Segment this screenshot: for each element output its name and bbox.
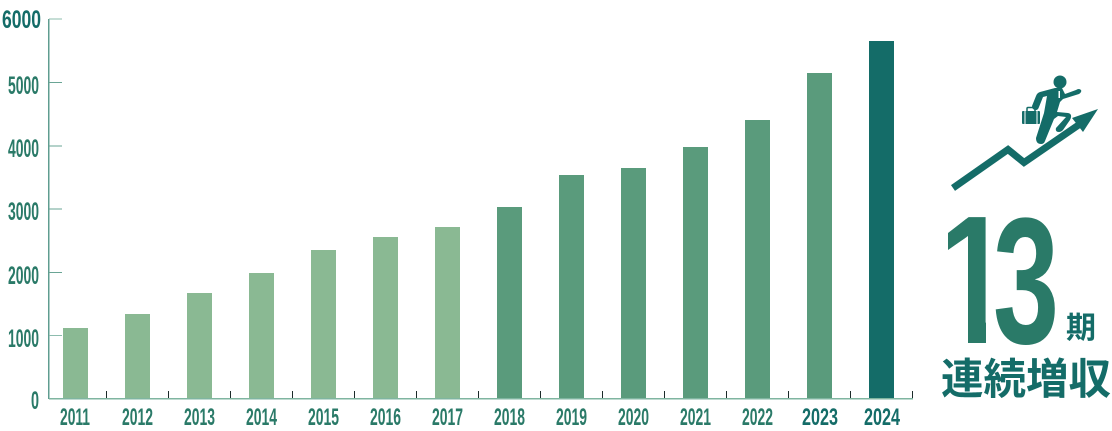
y axis labels: 1000 xyxy=(8,325,39,353)
icon: businessman running up a rising arrow xyxy=(953,76,1098,188)
headline number: 13 xyxy=(948,217,1055,345)
y axis labels xyxy=(2,6,41,415)
y axis labels: 4000 xyxy=(8,135,39,163)
icon: briefcase xyxy=(1022,108,1040,124)
y axis labels: 5000 xyxy=(8,72,39,100)
headline number: 13: 3 xyxy=(993,181,1059,382)
y axis labels: 3000 xyxy=(8,198,39,226)
x axis labels: 2011 xyxy=(60,404,90,431)
label: 期: 期 xyxy=(1066,312,1096,345)
x axis labels: 2017 xyxy=(432,404,463,431)
x axis labels: 2020 xyxy=(618,404,649,431)
icon: rising arrow xyxy=(953,109,1098,188)
x axis labels: 2014 xyxy=(246,404,277,431)
y axis xyxy=(48,18,62,399)
x axis labels: 2018 xyxy=(494,404,525,431)
icon: runner xyxy=(1032,76,1081,144)
x axis labels: 2021 xyxy=(680,404,711,431)
x axis labels: 2015 xyxy=(308,404,339,431)
x axis labels: 2023 xyxy=(802,404,838,431)
headline number: 13: 1 xyxy=(932,181,1010,382)
x axis xyxy=(49,391,913,400)
x axis labels: 2022 xyxy=(742,404,773,431)
bars xyxy=(63,41,894,398)
x axis labels: 2016 xyxy=(370,404,401,431)
y axis labels: 2000 xyxy=(8,262,39,290)
x axis labels: 2019 xyxy=(556,404,587,431)
x axis labels: 2024 xyxy=(864,404,900,431)
y axis labels: 6000 xyxy=(2,6,41,34)
label: 連続増収: 連続増収 xyxy=(941,357,1111,404)
y axis labels: 0 xyxy=(31,387,39,415)
x axis labels: 2012 xyxy=(122,404,153,431)
x axis labels: 2013 xyxy=(184,404,215,431)
x axis labels xyxy=(60,404,900,431)
